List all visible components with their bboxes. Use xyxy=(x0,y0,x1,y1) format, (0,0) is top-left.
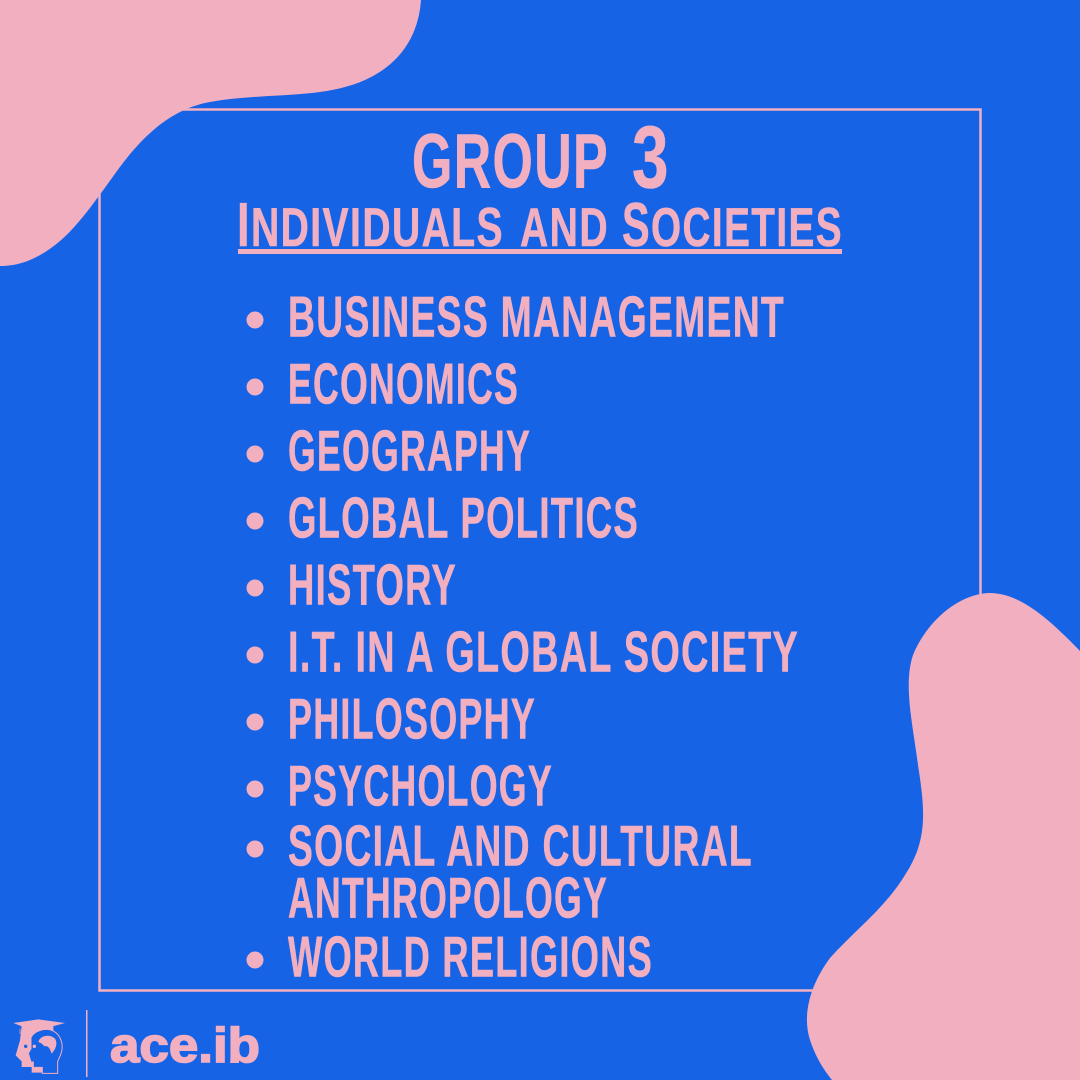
blob: top left xyxy=(0,0,421,266)
subtitle: AND xyxy=(520,196,609,258)
item: Social and Cultural Anthropology xyxy=(246,814,753,930)
item: Psychology: PSYCHOLOGY xyxy=(288,754,553,818)
blob: bottom right xyxy=(807,593,1080,1080)
item: Geography xyxy=(246,420,531,484)
item: Geography: GEOGRAPHY xyxy=(288,420,531,484)
subtitle: S xyxy=(622,191,651,260)
item: World Religions: WORLD RELIGIONS xyxy=(288,926,653,990)
subtitle: NDIVIDUALS xyxy=(251,196,504,258)
item: I.T. in a Global Society xyxy=(246,620,799,684)
item: Economics xyxy=(246,352,519,416)
title: 3 xyxy=(632,108,670,206)
subject list xyxy=(246,286,799,990)
item: Philosophy: PHILOSOPHY xyxy=(288,688,536,752)
item: I.T. in a Global Society: I.T. IN A GLOBAL SOCIETY xyxy=(288,620,799,684)
item: Psychology xyxy=(246,754,553,818)
title: GROUP xyxy=(412,118,609,204)
subtitle xyxy=(237,191,843,260)
item: Business Management: BUSINESS MANAGEMENT xyxy=(288,286,785,350)
item: Social and Cultural Anthropology: ANTHROPOLOGY xyxy=(288,866,608,930)
item: Social and Cultural Anthropology: SOCIAL AND CULTURAL xyxy=(288,814,753,878)
icon: graduate head logo xyxy=(13,1019,65,1073)
item: History: HISTORY xyxy=(288,554,457,618)
logo divider xyxy=(86,1010,88,1077)
item: Economics: ECONOMICS xyxy=(288,352,519,416)
brand name: ace.ib xyxy=(110,1019,260,1073)
item: World Religions xyxy=(246,926,653,990)
item: History xyxy=(246,554,457,618)
item: Global Politics xyxy=(246,486,639,550)
item: Global Politics: GLOBAL POLITICS xyxy=(288,486,639,550)
item: Business Management xyxy=(246,286,785,350)
subtitle: I xyxy=(237,191,251,260)
item: Philosophy xyxy=(246,688,536,752)
frame xyxy=(100,110,980,990)
subtitle: OCIETIES xyxy=(651,196,843,258)
